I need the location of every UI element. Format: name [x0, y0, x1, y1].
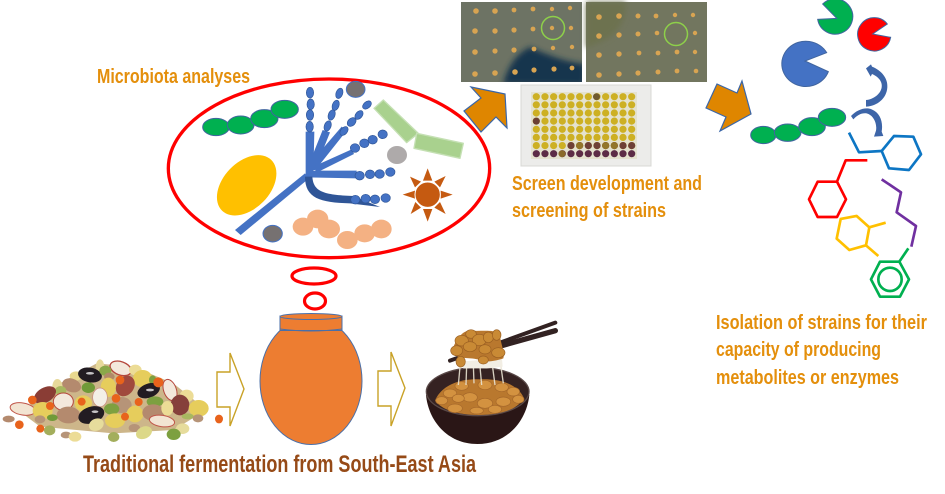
arrow: microbiota to screening — [464, 87, 507, 132]
icon: red enzyme — [858, 18, 891, 51]
yellow oval cell — [205, 144, 288, 227]
heading: Traditional fermentation from South-East Asia: Traditional fermentation from South-East Asia — [83, 451, 476, 478]
heading: Microbiota analyses: Microbiota analyses — [97, 66, 250, 88]
light grey coccus — [387, 146, 407, 164]
photo: agar plate right — [586, 2, 707, 82]
branching filamentous organism — [235, 87, 395, 235]
heading: Isolation of strains: metabolites or enzymes — [716, 367, 899, 389]
icon: green enzyme — [818, 0, 853, 34]
arrow: screening to isolation — [706, 81, 751, 131]
arrow: curved down to metabolites — [851, 108, 883, 137]
sticky strands — [458, 360, 503, 385]
panel: strains, enzymes and metabolites — [751, 0, 921, 297]
light green rods — [374, 100, 463, 158]
peach cluster cells — [293, 210, 392, 249]
molecule: purple chain — [882, 179, 916, 247]
bubble outline — [168, 79, 490, 258]
molecule: red — [809, 160, 867, 217]
photo: 96-well plate — [521, 85, 651, 166]
heading: Screen development and screening of strains: screening of strains — [512, 200, 666, 222]
green bacteria chain — [203, 100, 298, 136]
photo: agar plate left — [461, 2, 585, 85]
icon: fermentation jar — [260, 314, 362, 444]
panel: microbiota thought bubble — [168, 79, 490, 258]
heading: Screen development and screening of strains: Screen development and — [512, 173, 702, 195]
molecule: blue — [849, 133, 921, 170]
beans held by chopsticks — [452, 331, 504, 361]
molecule: yellow — [837, 216, 886, 256]
heading: Screen development and screening of strains — [512, 173, 702, 222]
dark grey coccus top — [346, 81, 365, 97]
thought bubble: large small ring — [292, 268, 336, 284]
sticky white patch — [460, 355, 503, 368]
illustration: pile of beans — [3, 358, 223, 442]
arrow: beans to jar — [217, 353, 244, 426]
green bacteria chain — [751, 108, 846, 144]
dark grey coccus bottom — [263, 225, 282, 242]
arrow: curved up to enzymes — [866, 64, 887, 107]
heading: Isolation of strains — [716, 312, 927, 389]
heading: Isolation of strains: capacity of producing — [716, 339, 881, 361]
thought bubble: small ring — [304, 293, 326, 309]
molecule: green ring — [871, 248, 909, 297]
illustration: bowl of fermented beans with chopsticks — [426, 323, 555, 444]
bowl — [426, 395, 529, 444]
chopsticks — [450, 323, 555, 361]
arrow: jar to natto — [378, 352, 405, 426]
fermented beans in bowl — [435, 379, 524, 415]
sun-shaped microbe — [403, 168, 453, 222]
icon: blue enzyme — [782, 41, 828, 87]
